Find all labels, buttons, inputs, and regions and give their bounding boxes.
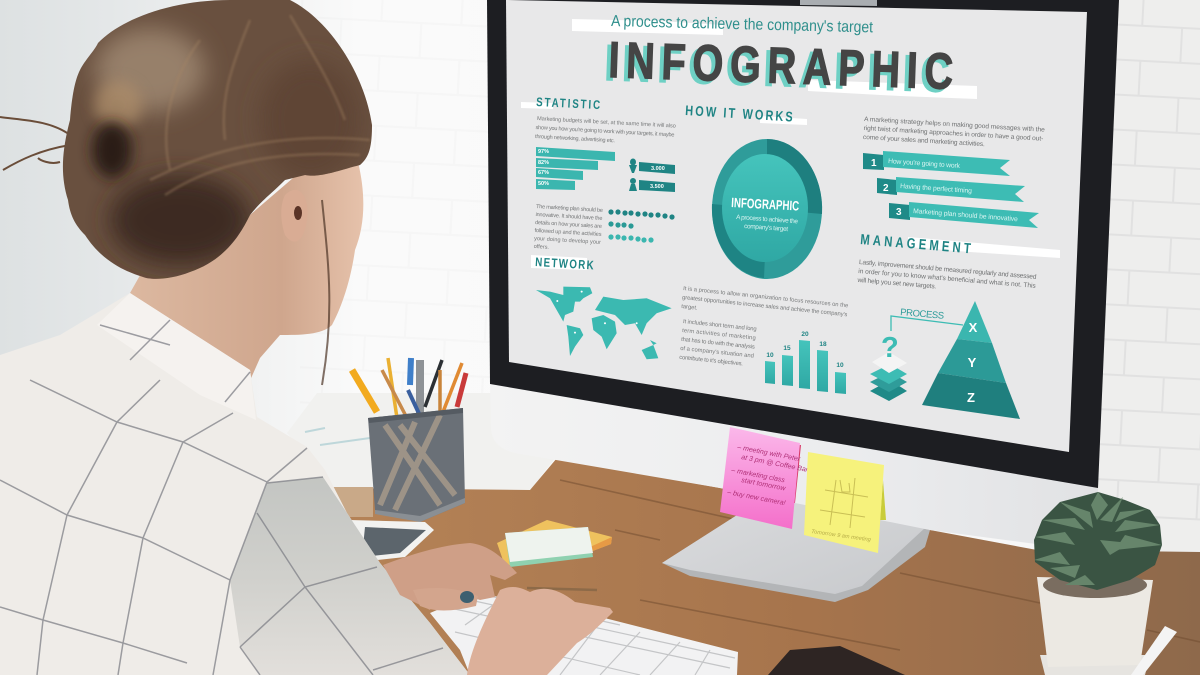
marketing plan text: offers. — [533, 244, 550, 251]
sticky note: pink: at 3 pm @ Coffee Bar — [741, 454, 809, 474]
sticky note: pink: – marketing class — [730, 467, 786, 484]
long term text: that has to do with the analysis — [681, 337, 755, 351]
bar chart — [765, 331, 846, 394]
bar chart: 18 — [819, 341, 827, 348]
marketing strategy text: right twist of marketing approaches in order to have a good out- — [863, 125, 1043, 143]
long term text — [679, 319, 757, 369]
dark tablet — [768, 646, 905, 675]
sticky note: yellow — [804, 452, 886, 553]
ribbon 2: 2 — [883, 183, 889, 194]
screen — [506, 0, 1087, 452]
statistic text: through networking, advertising etc. — [535, 134, 616, 144]
bar chart: 10 — [766, 352, 774, 359]
panel: management: MANAGEMENT — [860, 231, 972, 257]
how it works text: greatest opportunities to increase sales and achieve the company's — [682, 295, 848, 318]
marketing plan text: your doing to develop your — [534, 236, 601, 246]
dot rows — [608, 209, 675, 243]
donut chart: INFOGRAPHIC — [731, 195, 800, 214]
phone — [350, 520, 434, 562]
ear — [281, 190, 308, 242]
donut chart: A process to achieve the — [736, 214, 799, 225]
marketing plan text: The marketing plan should be — [536, 204, 603, 214]
panel: statistic — [521, 96, 676, 254]
pyramid — [922, 301, 1020, 419]
subtitle with white strip: A process to achieve the company's target — [611, 13, 874, 36]
panel: network — [531, 255, 672, 359]
icon: question mark on layers — [870, 332, 907, 401]
sticky note: pink — [720, 427, 809, 529]
sticky note: pink: – meeting with Peter — [736, 444, 801, 463]
ribbon 1: 1 — [871, 158, 877, 169]
ribbon 2: Having the perfect timing — [900, 183, 972, 195]
process diagram: PROCESS — [900, 307, 945, 322]
monitor chin — [490, 380, 1098, 552]
icon: people counters: 3.500 — [650, 184, 664, 190]
panel: how it works — [679, 103, 849, 394]
sticky note: yellow: Tomorrow 9 am meeting — [811, 529, 872, 543]
pencil cup — [352, 358, 466, 522]
marketing strategy text: come of your sales and marketing activities. — [863, 134, 985, 148]
icon: succulent — [1034, 492, 1162, 590]
process diagram — [870, 301, 1020, 419]
percentage bars: 82% — [538, 160, 549, 166]
keyboard — [430, 593, 738, 675]
hair — [0, 0, 380, 290]
collar — [97, 293, 256, 420]
statistic text: show you how you're going to work with your targets, it maybe — [535, 125, 675, 139]
marketing strategy text — [863, 116, 1045, 152]
percentage bars: 97% — [538, 149, 549, 155]
bar chart: 15 — [783, 345, 791, 352]
marketing plan text — [533, 204, 603, 254]
marketing plan text: innovative. It should have the — [535, 212, 603, 222]
ribbon 1: How you're going to work — [888, 158, 961, 170]
monitor stand — [662, 490, 930, 602]
sleeve — [230, 477, 470, 675]
how it works text — [681, 286, 849, 327]
percentage bars: 67% — [538, 170, 549, 176]
wooden desk — [333, 458, 1200, 675]
management text — [856, 259, 1037, 299]
management text: in order for you to know what's beneficial and what is not. This — [858, 268, 1037, 290]
plant pot — [1034, 492, 1177, 675]
pencil on desk — [527, 588, 597, 590]
percentage bars — [536, 147, 615, 190]
panel: how it works: HOW IT WORKS — [685, 103, 793, 125]
sticky note stack — [497, 520, 612, 567]
ribbon 3: Marketing plan should be innovative — [913, 208, 1018, 223]
how it works text: target. — [681, 304, 698, 312]
long term text: of a company's situation and — [680, 346, 754, 360]
ribbon 1 — [863, 151, 1010, 176]
shirt — [0, 293, 470, 675]
neck and face — [130, 162, 363, 385]
hand on keyboard — [467, 587, 613, 675]
world map — [536, 287, 672, 359]
pyramid: Y — [968, 355, 977, 370]
statistic text: Marketing budgets will be set, at the same time it will also — [537, 116, 676, 130]
bar chart: 20 — [801, 331, 809, 338]
long term text: term activities of marketing — [682, 328, 756, 342]
panel: statistic: STATISTIC — [536, 96, 600, 112]
marketing strategy text: A marketing strategy helps on making good messages with the — [864, 116, 1045, 134]
sticky note: pink: start tomorrow — [741, 477, 787, 493]
long term text: contribute to it's objectives. — [679, 355, 744, 368]
bar chart: 10 — [836, 362, 844, 369]
icon: question mark on layers: ? — [881, 332, 899, 364]
ribbon list — [863, 151, 1039, 228]
person — [0, 0, 613, 675]
pyramid: X — [969, 320, 978, 335]
paper on desk — [287, 393, 557, 490]
pyramid: Z — [967, 390, 975, 405]
title: INFOGRAPHIC — [608, 31, 954, 100]
title: INFOGRAPHIC — [604, 34, 950, 103]
marketing plan text: followed up and the activities — [534, 228, 602, 238]
icon: people counters: 3.000 — [651, 166, 665, 172]
percentage bars: 50% — [538, 181, 549, 187]
management text: Lastly, improvement should be measured regularly and assessed — [859, 259, 1037, 281]
monitor bezel — [487, 0, 1119, 488]
ribbon 2 — [877, 177, 1025, 202]
management text: will help you set new targets. — [856, 277, 937, 291]
long term text: It includes short term and long — [683, 319, 757, 333]
icon: people counters — [629, 158, 675, 192]
panel: network: NETWORK — [535, 256, 594, 273]
statistic text — [535, 116, 676, 148]
marketing plan text: details on how your sales are — [535, 220, 602, 230]
ribbon 3: 3 — [896, 207, 902, 218]
donut chart: company's target — [744, 223, 788, 233]
panel: management — [856, 231, 1060, 299]
donut chart — [712, 139, 822, 279]
ribbon 3 — [889, 202, 1039, 228]
sticky note: pink: – buy new camera! — [726, 489, 786, 507]
how it works text: It is a process to allow an organization to focus resources on the — [683, 286, 849, 309]
hand on mouse — [383, 543, 517, 610]
